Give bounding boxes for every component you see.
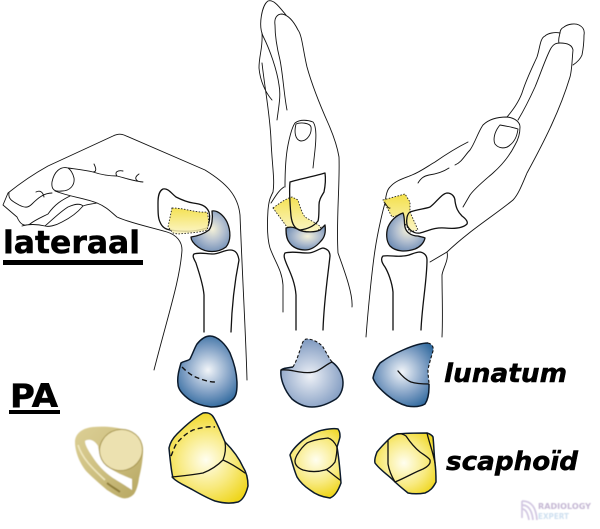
radius	[193, 250, 239, 332]
lateral hand, wrist flexed	[3, 134, 247, 380]
middle hand, neutral	[259, 1, 352, 330]
thumb and nail	[52, 164, 143, 191]
right hand, wrist extended	[366, 24, 584, 337]
watermark logo	[522, 501, 591, 521]
lunate crescent	[191, 211, 230, 252]
hand outline and fingers	[275, 14, 352, 307]
heading: PA: PA	[10, 377, 58, 415]
yellow scaphoid overlay	[383, 194, 418, 232]
hand outline	[3, 134, 247, 380]
PA lunate 2	[281, 339, 343, 407]
ring shadow notch	[107, 483, 120, 492]
lunate crescent	[387, 213, 425, 251]
PA scaphoid 2	[290, 429, 341, 498]
heading: lateraal: lateraal	[3, 225, 140, 261]
logo text: RADIOLOGY	[538, 502, 591, 511]
signet ring photo	[75, 425, 147, 498]
ring highlight band	[78, 445, 105, 480]
PA scaphoid 3	[375, 433, 436, 494]
thumb and nail	[285, 120, 316, 187]
watermark logo: EXPERT	[538, 512, 569, 521]
radius	[382, 252, 427, 330]
yellow scaphoid overlay	[168, 208, 208, 234]
logo mark	[522, 501, 537, 520]
label: lunatum: lunatum	[444, 359, 567, 389]
lunate crescent	[286, 225, 325, 250]
thumb nail	[494, 125, 518, 148]
yellow scaphoid overlay	[273, 197, 321, 233]
capitate bone	[290, 173, 325, 230]
PA lunate 3	[373, 343, 433, 407]
PA lunate 1	[178, 336, 237, 407]
radius	[284, 248, 330, 330]
hand outline and fingers	[366, 142, 468, 337]
PA scaphoid 1	[169, 413, 248, 503]
capitate bone	[158, 189, 210, 231]
capitate bone	[407, 193, 467, 233]
label: scaphoid: scaphoïd	[446, 447, 578, 477]
ring opening	[85, 440, 132, 490]
ring signet face	[95, 425, 147, 475]
ring band	[75, 427, 143, 498]
